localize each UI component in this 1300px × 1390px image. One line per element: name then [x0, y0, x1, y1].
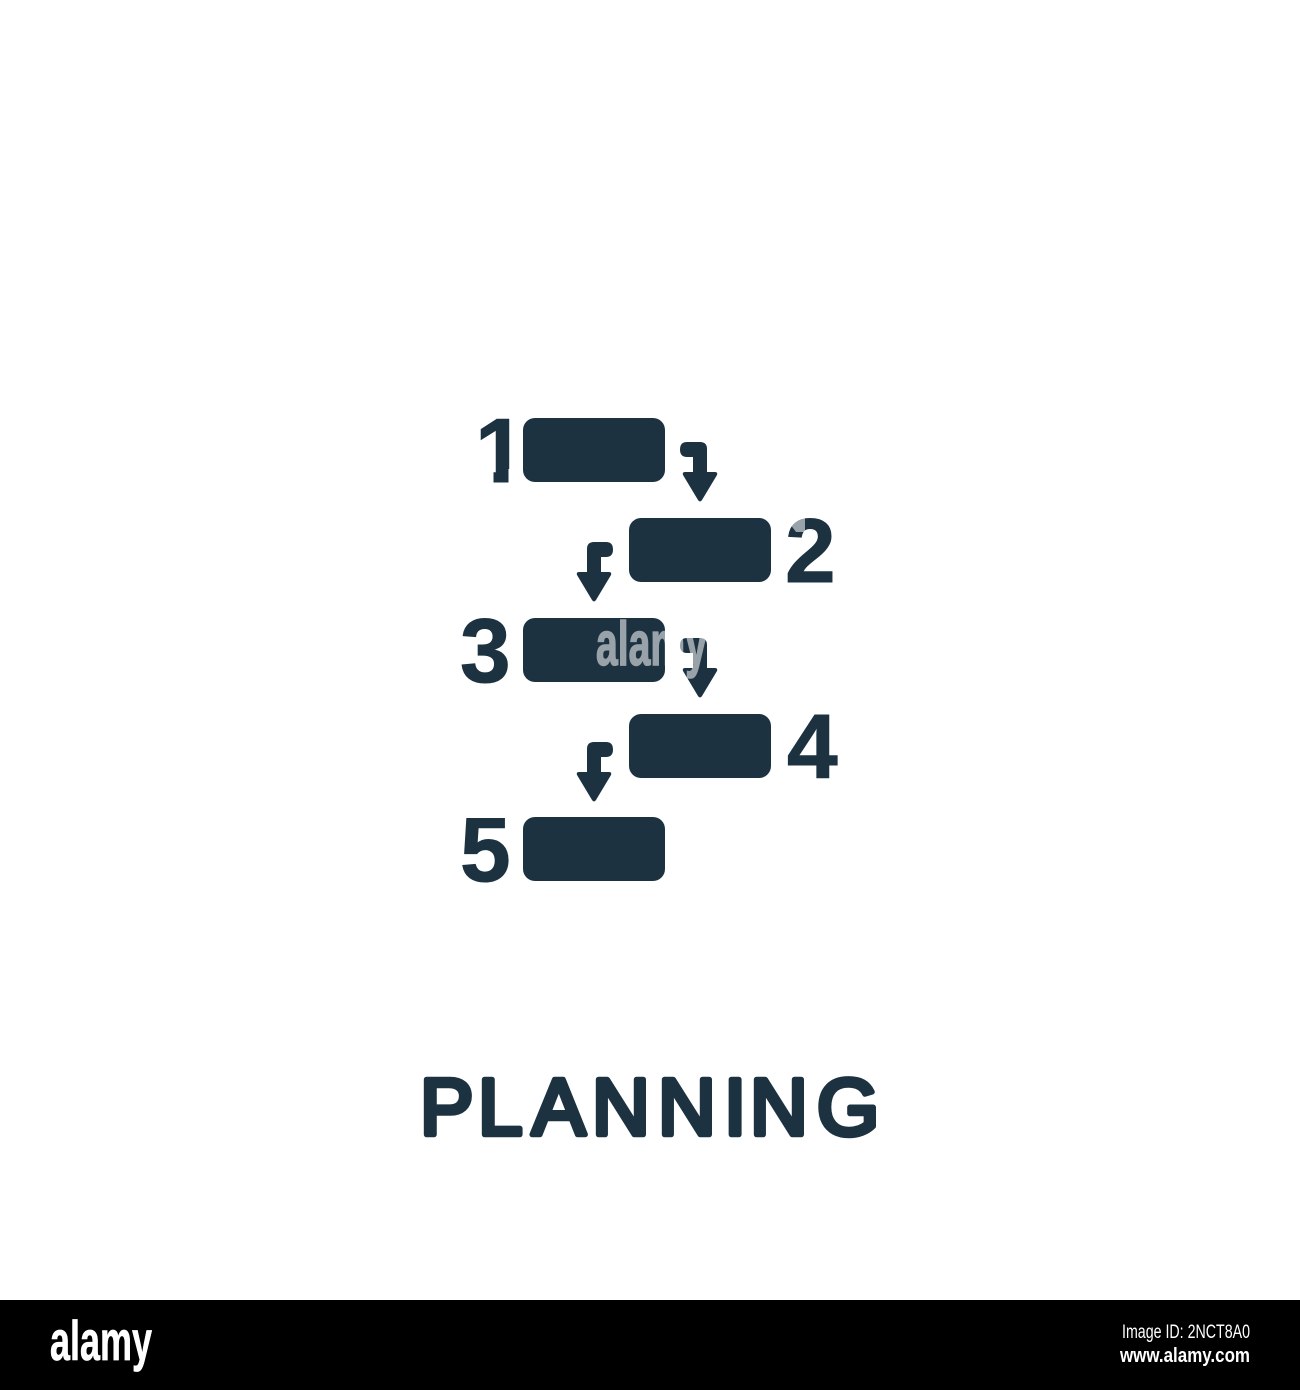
step 1 number and box: 1	[475, 401, 526, 502]
step 5 number and box	[460, 800, 665, 901]
footer logo: alamy	[50, 1309, 152, 1372]
arrow from step 3 to step 4	[680, 638, 717, 698]
website: www.alamy.com	[1119, 1345, 1250, 1367]
step 4 box and number	[629, 697, 838, 798]
step 2 box and number: 2	[785, 501, 836, 602]
arrow from step 4 to step 5	[577, 742, 613, 802]
step 3 number and box: 3	[460, 601, 511, 702]
step 2 box and number	[629, 501, 836, 602]
step 4 box and number: 4	[787, 697, 838, 798]
footer bar	[0, 1300, 1300, 1390]
watermark overlay	[596, 517, 805, 679]
image id: Image ID: 2NCT8A0	[1122, 1322, 1250, 1343]
arrow from step 1 to step 2	[680, 442, 717, 502]
watermark overlay: alamy	[596, 610, 707, 679]
step 1 number and box	[470, 401, 665, 502]
arrow from step 2 to step 3	[577, 542, 613, 602]
planning flow icon	[460, 401, 838, 901]
step 5 number and box: 5	[460, 800, 511, 901]
title: PLANNING	[420, 1062, 879, 1152]
step 3 number and box	[460, 601, 665, 702]
